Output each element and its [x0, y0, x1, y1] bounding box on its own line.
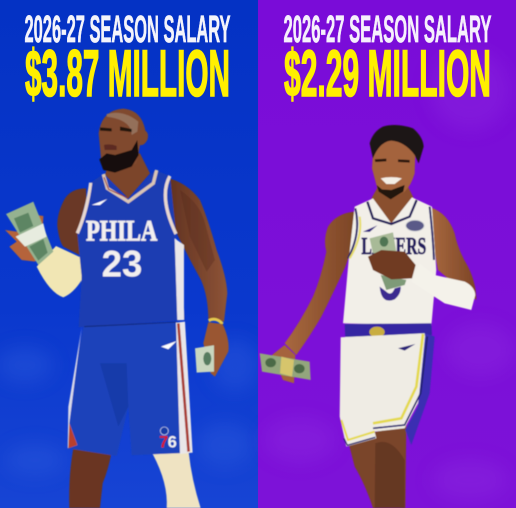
team logo: 6 — [168, 433, 177, 452]
waistband — [345, 323, 432, 339]
jersey — [343, 197, 436, 326]
left upper arm — [57, 188, 87, 257]
waistband — [84, 322, 177, 332]
panel: purple background — [258, 0, 516, 508]
text: 2026-27 SEASON SALARY — [24, 9, 230, 51]
wristband — [209, 319, 223, 324]
right upper arm — [431, 207, 476, 300]
right arm — [165, 177, 227, 322]
jersey lettering: LAKERS — [361, 234, 426, 260]
legs — [349, 425, 406, 508]
panel: blue background — [0, 0, 259, 508]
left hand — [5, 215, 43, 262]
player: right in Los Angeles jersey — [260, 125, 476, 508]
neck — [105, 153, 150, 198]
jersey number: 23 — [102, 243, 142, 285]
shorts logo — [161, 341, 177, 349]
legs — [69, 445, 201, 508]
shorts — [340, 333, 435, 447]
money stack left — [6, 202, 53, 265]
left arm — [285, 212, 355, 355]
left hand — [272, 345, 295, 383]
jersey lettering: PHILA — [86, 215, 158, 248]
shorts — [68, 322, 193, 456]
team logo — [159, 427, 177, 452]
hair — [370, 125, 424, 163]
money stack chest — [370, 232, 406, 290]
arm sleeve — [37, 246, 83, 297]
jersey logo — [363, 225, 377, 232]
head — [370, 125, 424, 199]
team logo: 7 — [159, 433, 168, 452]
arm sleeve — [411, 263, 475, 310]
jersey number — [380, 287, 401, 301]
jersey — [77, 170, 185, 327]
head — [99, 109, 148, 173]
text: $3.87 MILLION — [25, 36, 230, 110]
money stack right — [195, 345, 214, 373]
neck — [370, 183, 415, 223]
shorts logo — [398, 344, 415, 351]
right hand — [203, 322, 229, 377]
hand on chest — [368, 250, 416, 279]
jersey logo — [92, 199, 107, 205]
jersey patch — [406, 220, 424, 231]
money stack left — [260, 353, 311, 380]
player: left in Philadelphia jersey — [5, 109, 229, 508]
